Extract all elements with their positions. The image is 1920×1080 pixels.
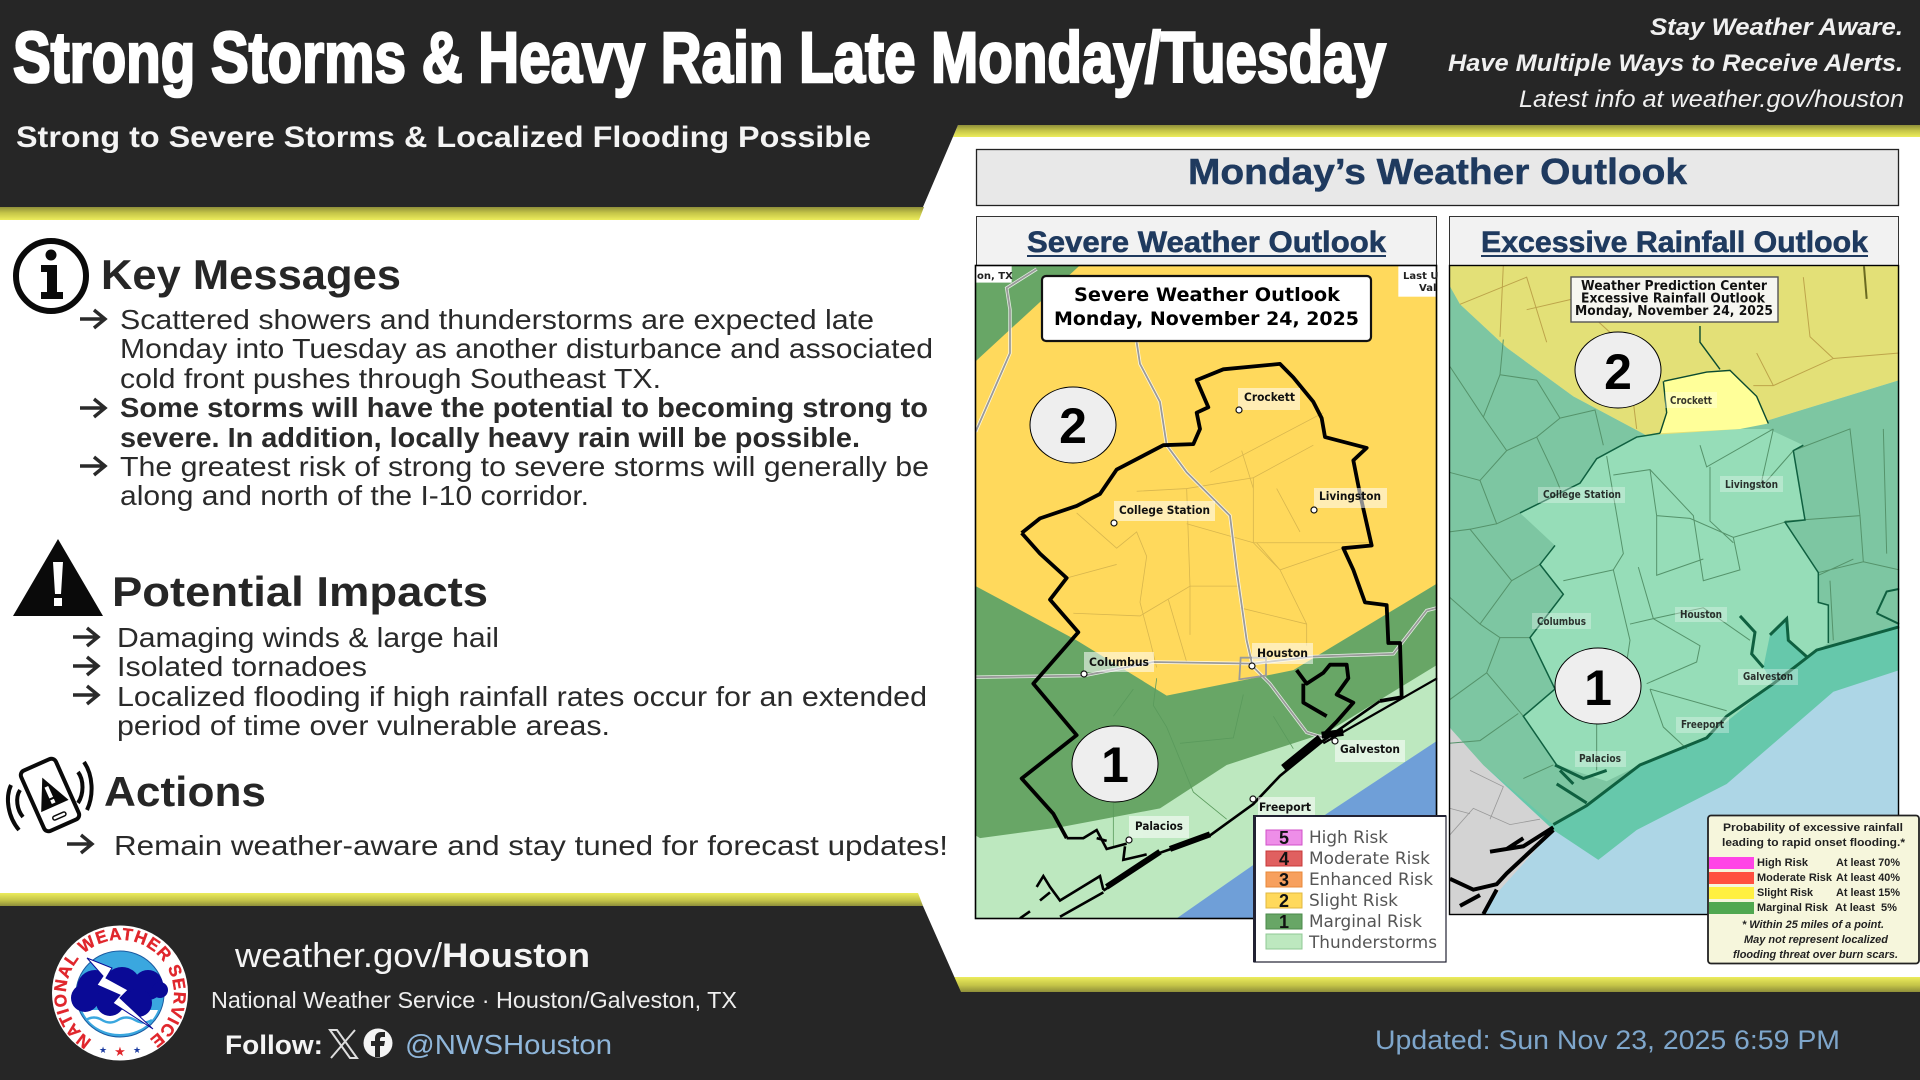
key messages text: Scattered showers and thunderstorms are expected late bbox=[120, 304, 874, 335]
map: severe weather risk: Val bbox=[1419, 283, 1436, 294]
heading: severe weather outlook bbox=[976, 216, 1436, 266]
city labels: Freeport bbox=[1259, 800, 1311, 814]
header note: stay aware: Have Multiple Ways to Receive Alerts. bbox=[1448, 50, 1903, 77]
legend: rainfall probability: Slight Risk bbox=[1757, 887, 1814, 899]
legend: rainfall probability: At least 40% bbox=[1836, 872, 1900, 884]
heading: excessive rainfall outlook: Excessive Rainfall Outlook bbox=[1481, 226, 1868, 259]
city labels: Livingston bbox=[1725, 478, 1778, 491]
map title box bbox=[1042, 276, 1371, 341]
legend: severe risk: Thunderstorms bbox=[1308, 933, 1437, 953]
legend: severe risk: 1 bbox=[1279, 912, 1289, 932]
footer social: @NWSHouston bbox=[405, 1029, 612, 1060]
key messages text: The greatest risk of strong to severe storms will generally be bbox=[120, 451, 929, 482]
decorative coastline bbox=[1520, 433, 1899, 825]
legend: rainfall probability: At least 5% bbox=[1835, 902, 1897, 914]
map: severe weather risk bbox=[976, 265, 1446, 962]
update timestamp: Updated: Sun Nov 23, 2025 6:59 PM bbox=[1375, 1025, 1840, 1055]
map title box: Excessive Rainfall Outlook bbox=[1581, 292, 1765, 306]
city labels: Freeport bbox=[1681, 718, 1724, 731]
heading: severe weather outlook: Severe Weather Outlook bbox=[1027, 226, 1386, 259]
legend: rainfall probability: At least 70% bbox=[1836, 857, 1900, 869]
panel: potential impacts bbox=[13, 539, 927, 741]
logo: national weather service seal: ★ bbox=[99, 1045, 107, 1055]
map title box: Monday, November 24, 2025 bbox=[1575, 304, 1773, 319]
city labels bbox=[1532, 392, 1798, 767]
legend: rainfall probability: Probability of excessive rainfall bbox=[1723, 822, 1903, 834]
legend: rainfall probability: High Risk bbox=[1757, 857, 1809, 869]
risk badge 2: 2 bbox=[1059, 398, 1087, 454]
legend: rainfall probability: * Within 25 miles of a point. bbox=[1742, 919, 1884, 931]
impacts text: Localized flooding if high rainfall rates occur for an extended bbox=[117, 681, 927, 712]
footer social bbox=[225, 1028, 612, 1060]
footer website: weather.gov/ Houston bbox=[234, 937, 590, 975]
city labels: Galveston bbox=[1743, 670, 1793, 683]
header note: stay aware: Latest info at weather.gov/houston bbox=[1519, 86, 1904, 113]
panel: excessive rainfall outlook bbox=[1449, 216, 1919, 964]
map title box bbox=[1571, 277, 1778, 322]
icon: X bbox=[330, 1030, 357, 1058]
key messages text bbox=[120, 304, 933, 511]
risk badge 2 bbox=[1030, 387, 1116, 463]
header note: stay aware: Stay Weather Aware. bbox=[1650, 14, 1903, 41]
city labels: Columbus bbox=[1089, 655, 1149, 669]
legend: severe risk: 4 bbox=[1279, 849, 1289, 869]
city labels: College Station bbox=[1543, 488, 1621, 501]
legend: severe risk: 3 bbox=[1279, 870, 1289, 890]
impacts text bbox=[117, 622, 927, 741]
risk badge 2: 2 bbox=[1604, 344, 1632, 400]
legend: rainfall probability: May not represent localized bbox=[1744, 934, 1888, 946]
panel: severe weather outlook bbox=[976, 216, 1446, 962]
map title box: Weather Prediction Center bbox=[1581, 279, 1768, 294]
icon: phone alert bbox=[8, 757, 92, 833]
logo: national weather service seal: ★ bbox=[114, 1044, 126, 1059]
risk badge 1 bbox=[1555, 648, 1641, 724]
impacts text: Isolated tornadoes bbox=[117, 651, 367, 682]
city labels: Crockett bbox=[1244, 390, 1295, 404]
city labels: Houston bbox=[1680, 608, 1722, 621]
decorative coastline bbox=[1020, 678, 1437, 918]
key messages text: severe. In addition, locally heavy rain will be possible. bbox=[120, 422, 860, 453]
city labels: Galveston bbox=[1340, 742, 1400, 756]
city labels: College Station bbox=[1119, 503, 1210, 517]
map: severe weather risk: on, TX bbox=[977, 271, 1013, 282]
arrows bbox=[73, 628, 98, 704]
map title box: Monday, November 24, 2025 bbox=[1054, 308, 1359, 330]
logo: national weather service seal: NATIONAL WEATHER SERVICE bbox=[54, 928, 186, 1050]
header banner bbox=[0, 0, 1920, 220]
arrow bbox=[67, 835, 92, 853]
legend: severe risk: 5 bbox=[1279, 828, 1289, 848]
legend: severe risk: Enhanced Risk bbox=[1309, 870, 1433, 890]
map title box: Severe Weather Outlook bbox=[1074, 284, 1340, 306]
city labels: Livingston bbox=[1319, 489, 1381, 503]
heading: actions: Actions bbox=[104, 768, 266, 815]
impacts text: Damaging winds & large hail bbox=[117, 622, 499, 653]
decorative highways bbox=[976, 269, 1437, 741]
legend: severe risk: Slight Risk bbox=[1309, 891, 1398, 911]
city labels: Crockett bbox=[1670, 394, 1712, 407]
legend: rainfall probability: At least 15% bbox=[1836, 887, 1900, 899]
legend: rainfall probability: Marginal Risk bbox=[1757, 902, 1829, 914]
decorative county lines bbox=[1449, 340, 1899, 779]
title: Strong Storms & Heavy Rain Late Monday/Tuesday bbox=[13, 19, 1386, 98]
city labels: Houston bbox=[1257, 646, 1308, 660]
subtitle: Strong to Severe Storms & Localized Flooding Possible bbox=[16, 121, 871, 154]
city labels: Palacios bbox=[1579, 752, 1621, 765]
legend: severe risk: Moderate Risk bbox=[1309, 849, 1430, 869]
header note: stay aware bbox=[1448, 14, 1904, 113]
city labels: Palacios bbox=[1135, 819, 1183, 833]
panel: key messages bbox=[16, 241, 933, 511]
legend: rainfall probability: leading to rapid onset flooding.* bbox=[1722, 837, 1906, 849]
risk badge 2 bbox=[1575, 332, 1661, 408]
legend: rainfall probability: flooding threat over burn scars. bbox=[1733, 949, 1898, 961]
decorative forecast area outline bbox=[1022, 364, 1402, 838]
legend: severe risk: 2 bbox=[1279, 891, 1289, 911]
heading: key messages: Key Messages bbox=[101, 251, 401, 298]
actions text: Remain weather-aware and stay tuned for forecast updates! bbox=[114, 830, 948, 861]
key messages text: Some storms will have the potential to becoming strong to bbox=[120, 392, 928, 423]
heading: potential impacts: Potential Impacts bbox=[112, 568, 488, 615]
city labels bbox=[1081, 388, 1405, 843]
city labels: Columbus bbox=[1537, 615, 1586, 628]
icon: information bbox=[16, 241, 86, 311]
map: excessive rainfall risk bbox=[1449, 265, 1919, 964]
risk badge 1: 1 bbox=[1584, 660, 1612, 716]
decorative county lines bbox=[1067, 413, 1370, 667]
legend: rainfall probability: Moderate Risk bbox=[1757, 872, 1833, 884]
footer office name: National Weather Service · Houston/Galveston, TX bbox=[211, 987, 737, 1013]
footer social: Follow: bbox=[225, 1030, 323, 1060]
risk badge 1: 1 bbox=[1101, 737, 1129, 793]
panel: monday's weather outlook header bbox=[976, 150, 1898, 206]
heading: excessive rainfall outlook bbox=[1450, 216, 1898, 266]
impacts text: period of time over vulnerable areas. bbox=[117, 710, 610, 741]
icon: warning triangle bbox=[13, 539, 103, 616]
arrows bbox=[80, 310, 105, 475]
panel: actions bbox=[8, 757, 948, 861]
legend: severe risk: High Risk bbox=[1309, 828, 1388, 848]
key messages text: along and north of the I-10 corridor. bbox=[120, 480, 589, 511]
legend: rainfall probability bbox=[1708, 816, 1919, 964]
icon: facebook bbox=[364, 1028, 392, 1058]
panel: monday's weather outlook header: Monday’s Weather Outlook bbox=[1188, 151, 1688, 192]
logo: national weather service seal: ★ bbox=[133, 1045, 141, 1055]
risk badge 1 bbox=[1072, 726, 1158, 802]
footer banner bbox=[0, 893, 1920, 1080]
legend: severe risk: Marginal Risk bbox=[1309, 912, 1422, 932]
legend: severe risk bbox=[1253, 815, 1446, 962]
map: severe weather risk: Last U bbox=[1403, 271, 1438, 282]
key messages text: cold front pushes through Southeast TX. bbox=[120, 363, 661, 394]
key messages text: Monday into Tuesday as another disturbance and associated bbox=[120, 333, 933, 364]
